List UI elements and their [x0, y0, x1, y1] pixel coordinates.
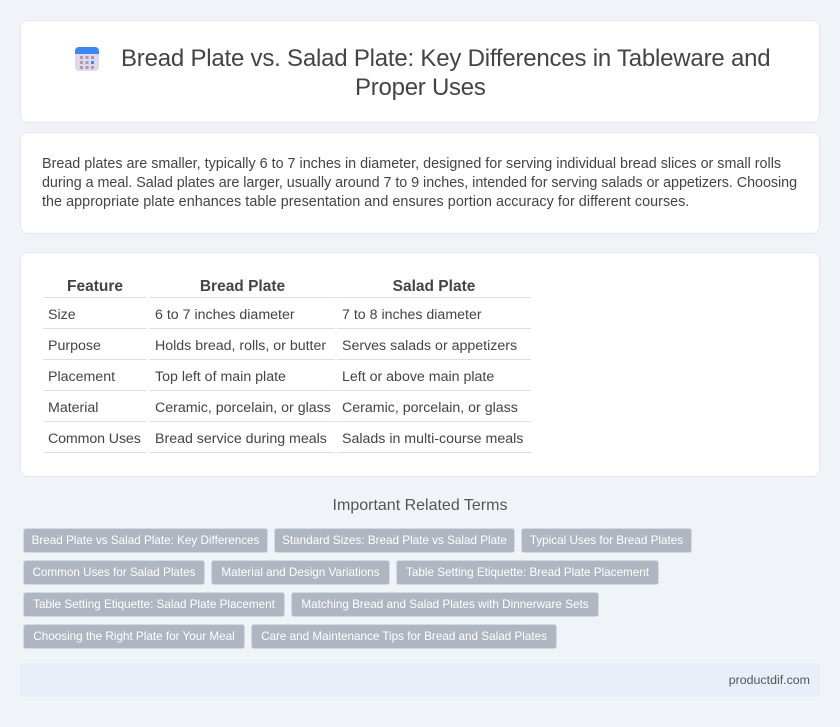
- tag group: related terms: [23, 528, 692, 649]
- common uses: salad: Salads in multi-course meals: [342, 431, 523, 447]
- tag: [211, 560, 390, 585]
- panel: title header: [20, 20, 820, 123]
- tag: [23, 592, 285, 617]
- tag: [251, 624, 557, 649]
- tag: Material and Design Variations: [221, 566, 380, 579]
- tag: [23, 560, 205, 585]
- tag: Table Setting Etiquette: Bread Plate Placement: [406, 566, 649, 579]
- heading: related terms: Important Related Terms: [333, 497, 507, 514]
- footer bar: [20, 663, 820, 697]
- material: salad: Ceramic, porcelain, or glass: [342, 400, 518, 416]
- placement: bread: Top left of main plate: [155, 369, 286, 385]
- table header: Feature: Feature: [67, 278, 123, 295]
- tag: [23, 624, 245, 649]
- size: bread: 6 to 7 inches diameter: [155, 307, 295, 323]
- panel: comparison table: [20, 252, 820, 477]
- row: Material: Material: [48, 400, 98, 416]
- tag: Common Uses for Salad Plates: [32, 566, 196, 579]
- tag: Table Setting Etiquette: Salad Plate Placement: [33, 598, 275, 611]
- table header: Salad Plate: Salad Plate: [393, 278, 475, 295]
- paragraph line 3: the appropriate plate enhances table presentation and ensures portion accuracy for different courses.: [42, 194, 689, 210]
- placement: salad: Left or above main plate: [342, 369, 494, 385]
- icon: calendar: [75, 47, 99, 71]
- material: bread: Ceramic, porcelain, or glass: [155, 400, 331, 416]
- size: salad: 7 to 8 inches diameter: [342, 307, 482, 323]
- footer source text: productdif.com: [729, 673, 810, 687]
- paragraph line 2: during a meal. Salad plates are larger, usually around 7 to 9 inches, intended for serving salads or appetizers. Choosing: [42, 175, 797, 191]
- row: Purpose: Purpose: [48, 338, 101, 354]
- tag: Matching Bread and Salad Plates with Dinnerware Sets: [301, 598, 589, 611]
- tag: Standard Sizes: Bread Plate vs Salad Plate: [282, 534, 507, 547]
- tag: [274, 528, 515, 553]
- tag: [23, 528, 268, 553]
- tag: [521, 528, 692, 553]
- tag: Choosing the Right Plate for Your Meal: [33, 630, 235, 643]
- tag: Bread Plate vs Salad Plate: Key Differences: [32, 534, 259, 547]
- row: Size: Size: [48, 307, 76, 323]
- purpose: salad: Serves salads or appetizers: [342, 338, 517, 354]
- tag: [291, 592, 599, 617]
- tag: [396, 560, 659, 585]
- paragraph line 1: Bread plates are smaller, typically 6 to 7 inches in diameter, designed for serving individual bread slices or small rolls: [42, 156, 781, 172]
- table header: Bread Plate: Bread Plate: [200, 278, 285, 295]
- panel: introduction: [20, 132, 820, 234]
- common uses: bread: Bread service during meals: [155, 431, 327, 447]
- purpose: bread: Holds bread, rolls, or butter: [155, 338, 326, 354]
- title line 1: Bread Plate vs. Salad Plate: Key Differences in Tableware and: [121, 45, 770, 72]
- tag: Care and Maintenance Tips for Bread and Salad Plates: [261, 630, 547, 643]
- row: Placement: Placement: [48, 369, 115, 385]
- tag: Typical Uses for Bread Plates: [530, 534, 683, 547]
- title line 2: Proper Uses: [355, 74, 486, 101]
- row: Common Uses: Common Uses: [48, 431, 141, 447]
